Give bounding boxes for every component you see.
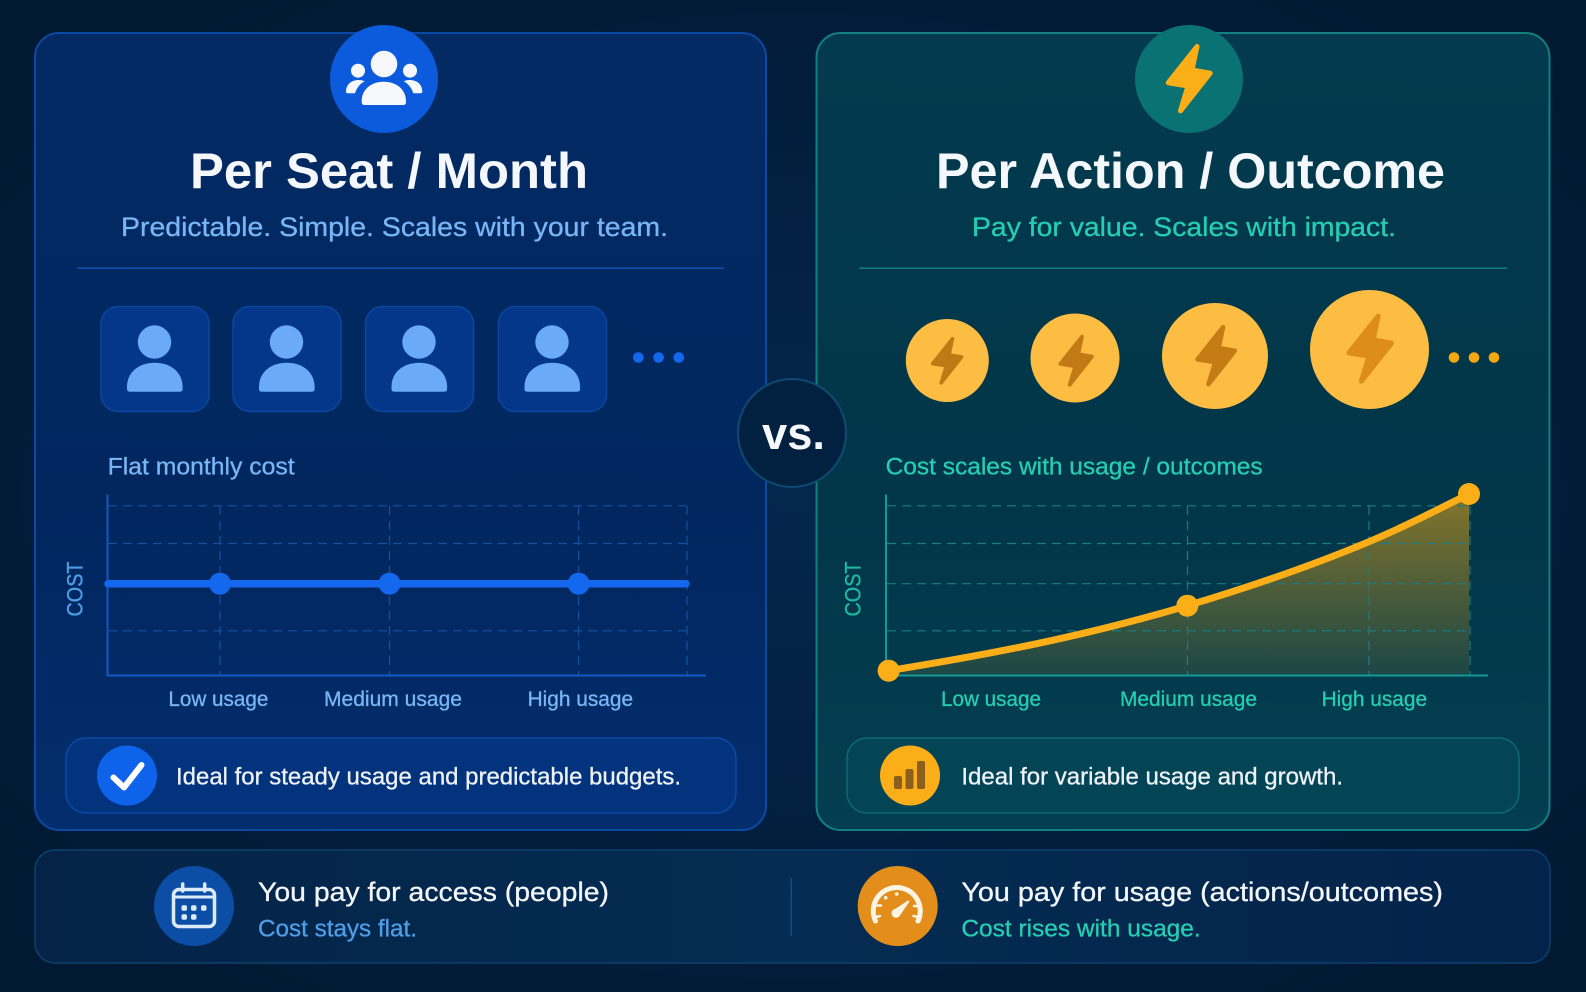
vs badge — [738, 379, 846, 487]
subtitle: Predictable. Simple. Scales with your team. — [121, 212, 668, 242]
summary: pay for usage: Cost rises with usage. — [961, 916, 1201, 942]
chart title: cost scales: Cost scales with usage / outcomes — [886, 454, 1263, 480]
vs badge: vs. — [762, 408, 825, 459]
bottom summary bar — [35, 850, 1550, 963]
callout: variable usage: Ideal for variable usage and growth. — [961, 764, 1343, 790]
seat icons row — [101, 306, 684, 412]
chart: rising cost curve — [840, 483, 1488, 711]
panel: per action / outcome — [816, 25, 1550, 830]
icon: gauge — [858, 866, 938, 946]
seat card 4 — [498, 306, 606, 412]
summary: pay for access — [154, 866, 609, 946]
x axis labels: High usage — [528, 688, 633, 711]
more dots — [633, 352, 684, 363]
coin 1 — [906, 319, 989, 402]
coin 2 — [1030, 314, 1120, 402]
y axis label: COST — [62, 562, 88, 616]
more dots — [1449, 352, 1499, 363]
coin 3 — [1162, 303, 1268, 409]
icon: lightning in header circle — [1135, 25, 1243, 133]
action coins row — [906, 290, 1499, 409]
summary: pay for access: Cost stays flat. — [258, 916, 417, 942]
subtitle: Pay for value. Scales with impact. — [972, 212, 1396, 242]
chart: flat cost line — [62, 494, 706, 711]
x axis labels: High usage — [1322, 688, 1427, 711]
heading: per action / outcome: Per Action / Outcome — [936, 143, 1445, 199]
icon: bar growth — [880, 746, 940, 806]
x axis labels: Low usage — [168, 688, 268, 711]
y axis label: COST — [840, 562, 866, 616]
panel: per seat / month — [35, 25, 766, 830]
seat card 2 — [233, 306, 341, 412]
callout: steady usage: Ideal for steady usage and predictable budgets. — [176, 764, 681, 790]
x axis labels: Low usage — [941, 688, 1041, 711]
seat card 1 — [101, 306, 209, 412]
icon: team in header circle — [330, 25, 438, 133]
icon: check — [97, 746, 157, 806]
x axis labels: Medium usage — [324, 688, 462, 711]
summary: pay for usage: You pay for usage (actions/outcomes) — [961, 877, 1443, 907]
summary: pay for usage — [858, 866, 1443, 946]
callout: steady usage — [66, 738, 736, 813]
icon: calendar — [154, 866, 234, 946]
x axis labels — [941, 688, 1427, 711]
summary: pay for access: You pay for access (people) — [258, 877, 609, 907]
seat card 3 — [366, 306, 474, 412]
chart title: flat monthly cost: Flat monthly cost — [108, 454, 295, 480]
callout: variable usage — [847, 738, 1519, 813]
x axis labels: Medium usage — [1120, 688, 1257, 711]
coin 4 — [1310, 290, 1429, 409]
x axis labels — [168, 688, 633, 711]
heading: per seat / month: Per Seat / Month — [190, 143, 588, 199]
